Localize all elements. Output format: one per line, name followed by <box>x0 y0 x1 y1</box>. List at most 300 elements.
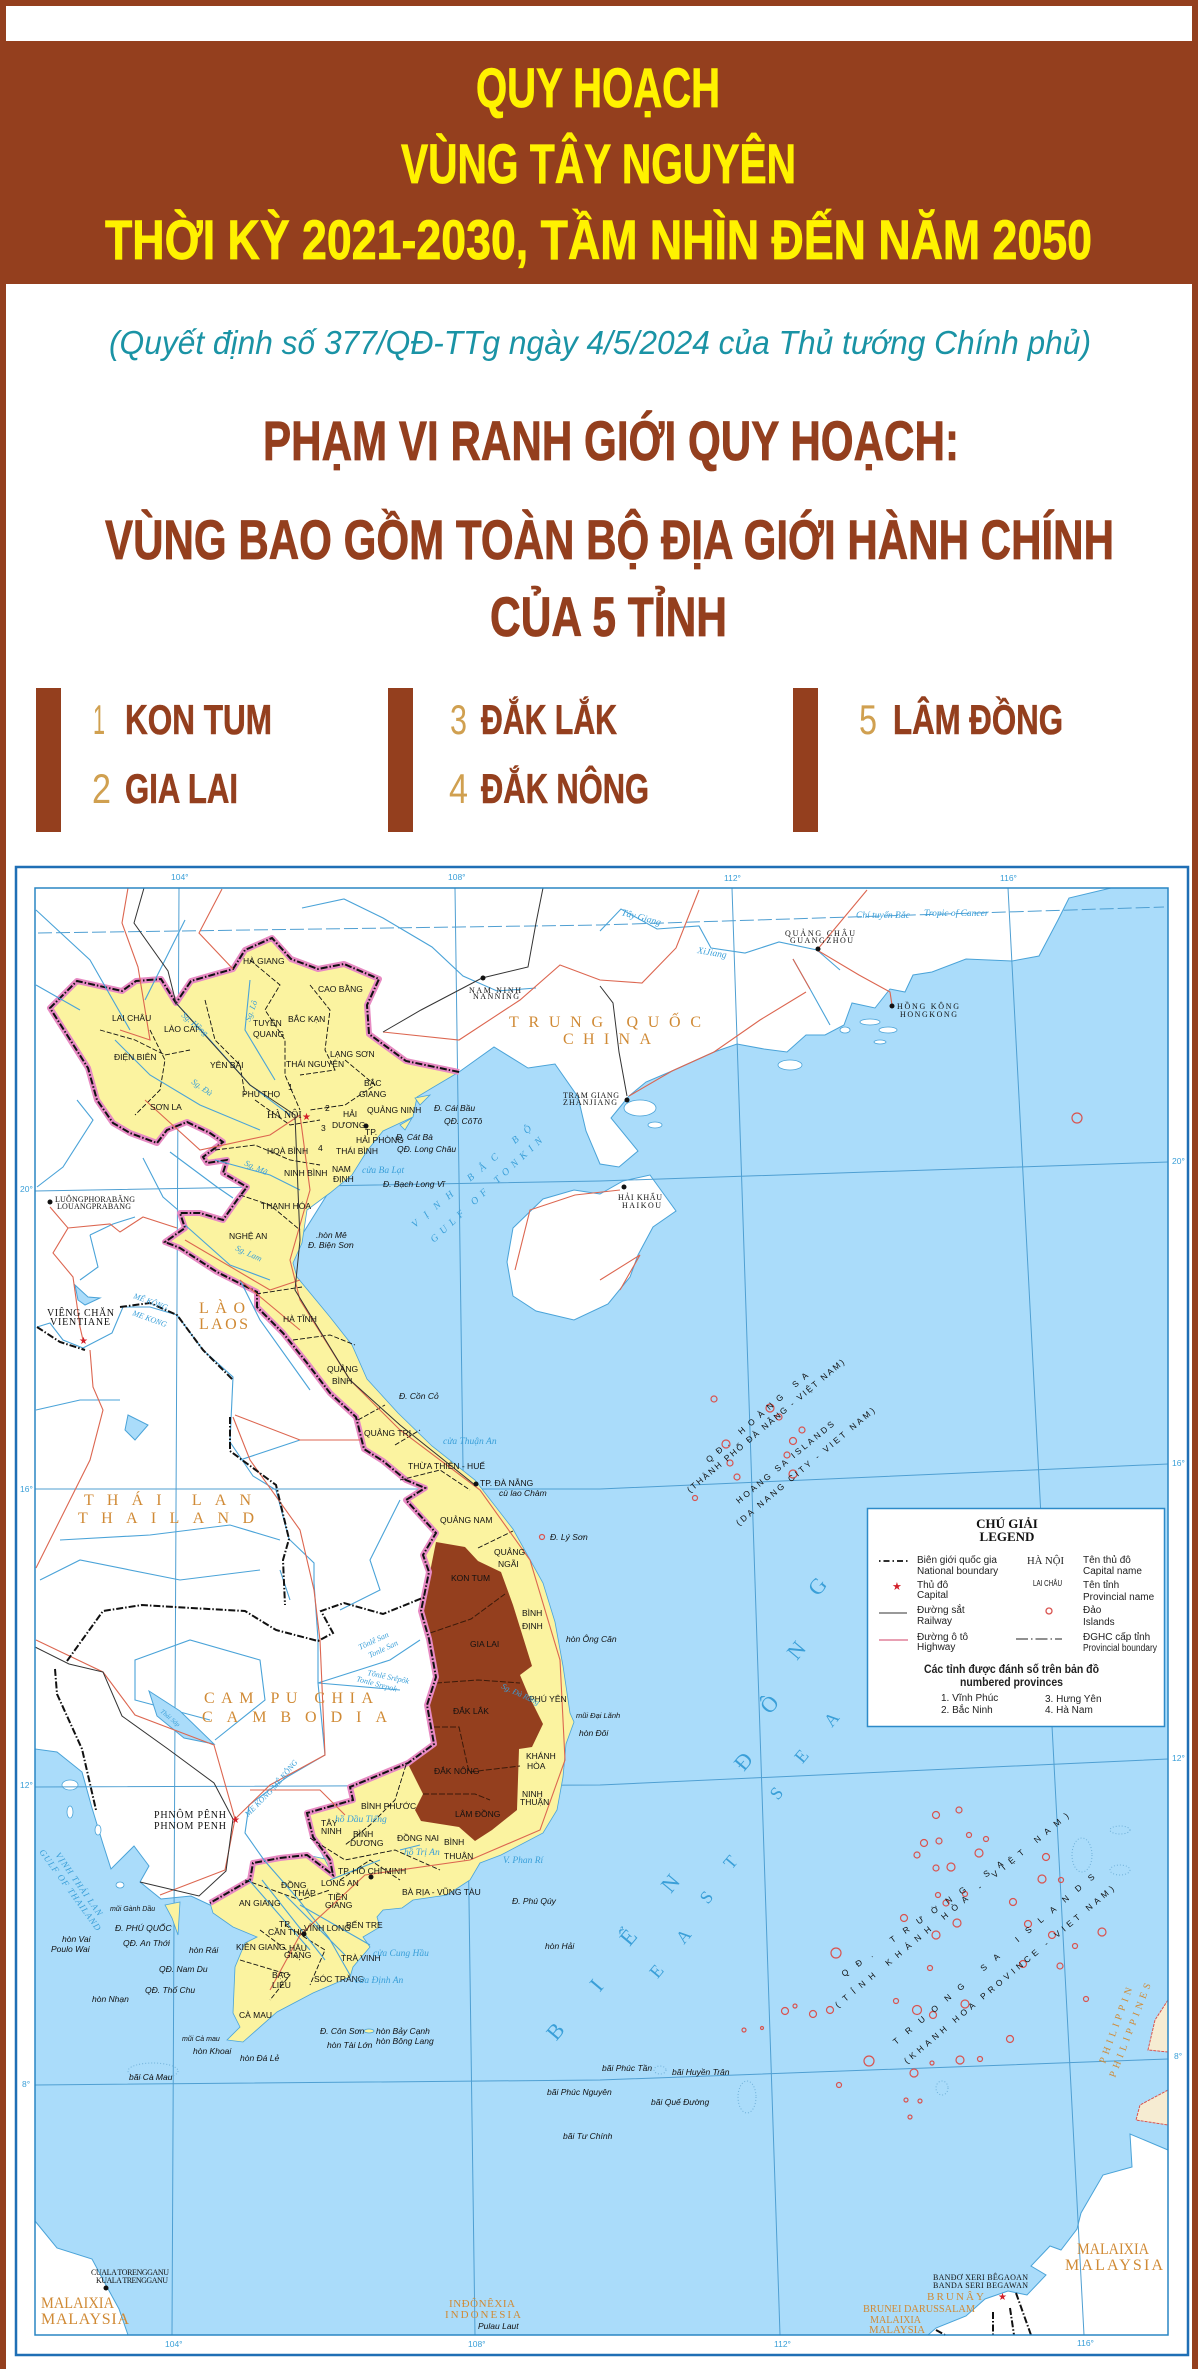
Vietnam land border <box>50 938 459 1903</box>
legend <box>868 1508 1164 1726</box>
island labels: Đ. Côn Sơn <box>320 2026 365 2036</box>
province labels: 3 <box>321 1123 326 1133</box>
East Sea label: S <box>766 1783 787 1803</box>
province labels: NINH BÌNH <box>284 1168 327 1178</box>
island labels: bãi Huyền Trân <box>672 2067 730 2077</box>
city labels: NANNING <box>473 992 519 1001</box>
province labels: QUẢNG NAM <box>440 1514 492 1525</box>
province labels: LÂM ĐỒNG <box>455 1808 500 1819</box>
degree labels: 16° <box>1172 1458 1185 1468</box>
island labels: hòn Bảy Cạnh <box>376 2026 430 2036</box>
city labels: VIENTIANE <box>50 1317 110 1328</box>
Vietnam territory <box>50 938 574 2042</box>
coastal islets <box>62 1019 897 1888</box>
city labels: TRẠM GIANG <box>563 1091 619 1100</box>
island labels: hòn Đôi <box>579 1728 609 1738</box>
city labels: NAM NINH <box>469 986 521 995</box>
water labels: ME KONG <box>242 1787 275 1819</box>
degree labels: 8° <box>1174 2051 1182 2061</box>
degree labels: 116° <box>1077 2338 1094 2348</box>
legend left column text: Biên giới quốc gia <box>917 1554 997 1566</box>
water labels: Tonle San <box>367 1638 399 1660</box>
country labels: THAILAND <box>78 1510 254 1527</box>
province labels: NINH <box>522 1789 543 1799</box>
city markers <box>48 946 894 2290</box>
numbered provinces: 3. Hưng Yên <box>1045 1694 1102 1705</box>
province list: column 1: 2 <box>92 765 111 812</box>
map inner border <box>35 888 1168 2335</box>
province labels: NGHỆ AN <box>229 1231 267 1241</box>
city labels: ZHANJIANG <box>563 1098 617 1107</box>
province labels <box>112 956 567 2020</box>
provincial boundaries <box>100 960 513 2000</box>
island labels: hòn Hải <box>545 1941 575 1951</box>
island labels: Đ. Cái Bầu <box>434 1103 475 1113</box>
province labels: BẾN TRE <box>346 1920 383 1930</box>
island labels: Đ. Cát Bà <box>396 1132 433 1142</box>
numbered provinces: numbered provinces <box>960 1677 1063 1689</box>
degree labels: 12° <box>1172 1753 1185 1763</box>
water labels: cửa Cung Hầu <box>373 1948 429 1959</box>
province labels: ĐỒNG <box>281 1879 306 1890</box>
degree labels: 8° <box>22 2079 30 2089</box>
province labels: HÀ GIANG <box>243 956 285 966</box>
title band: QUY HOẠCH <box>476 56 720 119</box>
Malaysia peninsula <box>35 2221 128 2335</box>
water labels: Tropic of Cancer <box>924 908 989 919</box>
legend right column text: ĐGHC cấp tỉnh <box>1083 1631 1150 1643</box>
water labels: cửa Định An <box>355 1976 404 1986</box>
legend right column text: Provincial name <box>1083 1592 1155 1603</box>
island labels: hòn Ông Căn <box>566 1634 617 1644</box>
East Sea label: N <box>782 1636 811 1664</box>
city labels: BANĐƠ XERI BÊGAOAN <box>933 2272 1028 2282</box>
Philippines fragment <box>1136 2000 1168 2125</box>
province labels: QUẢNG TRỊ <box>364 1427 411 1438</box>
water labels: VỊNH BẮC BỘ <box>409 1122 534 1230</box>
East Sea label: I <box>584 1974 608 1996</box>
island labels: hòn Vai <box>62 1934 92 1944</box>
island labels: QĐ. An Thới <box>123 1938 171 1948</box>
degree labels: 16° <box>20 1484 33 1494</box>
province labels: 4 <box>318 1143 323 1153</box>
scope heading: PHẠM VI RANH GIỚI QUY HOẠCH: <box>263 409 959 472</box>
province labels: QUANG <box>253 1029 284 1039</box>
East Sea label: B <box>541 2018 570 2045</box>
province list: column 1: KON TUM <box>125 696 272 743</box>
province labels: YÊN BÁI <box>210 1060 244 1070</box>
island labels: hòn Nhạn <box>92 1994 129 2004</box>
legend title: CHÚ GIẢI <box>976 1516 1038 1531</box>
archipelago labels: QĐ. TRƯỜNG SA <box>839 1858 1005 1979</box>
roads <box>36 888 892 1990</box>
province labels: TUYÊN <box>253 1018 282 1028</box>
Borneo <box>928 2134 1168 2335</box>
province labels: BÌNH <box>444 1837 464 1847</box>
province labels: BÌNH <box>522 1608 542 1618</box>
island labels: Đ. PHÚ QUỐC <box>115 1922 173 1933</box>
archipelago labels: (DA NANG CITY - VIET NAM) <box>734 1405 877 1528</box>
city labels: PHNÔM PÊNH <box>154 1809 226 1821</box>
province labels: DƯƠNG <box>350 1838 383 1848</box>
province labels: GIA LAI <box>470 1639 499 1649</box>
province labels: LONG AN <box>321 1878 359 1888</box>
Hainan island <box>507 1175 676 1320</box>
province labels: NINH <box>321 1826 342 1836</box>
city labels <box>47 928 1028 2290</box>
water labels: cửa Thuận An <box>443 1437 497 1447</box>
East Sea label: T <box>719 1852 742 1873</box>
numbered provinces: 2. Bắc Ninh <box>941 1703 993 1716</box>
island labels: QĐ. Long Châu <box>397 1144 456 1154</box>
province labels: TP. ĐÀ NẴNG <box>480 1477 533 1488</box>
legend symbols: ★ <box>892 1581 902 1593</box>
city labels: HAIKOU <box>622 1201 661 1210</box>
province labels: ĐẮK LẮK <box>453 1706 489 1716</box>
legend right column text: Tên thủ đô <box>1083 1554 1131 1566</box>
East Sea label: S <box>696 1887 717 1907</box>
water labels: Tây Giang <box>620 908 662 928</box>
islands off the coast <box>165 1095 430 2033</box>
country labels: MALAIXIA <box>41 2295 114 2312</box>
capital stars: ★ <box>79 1336 88 1347</box>
province labels: BẮC <box>364 1078 381 1088</box>
country labels: TRUNG QUỐC <box>509 1012 701 1031</box>
city labels: CUALA TORENGGANU <box>91 2268 169 2277</box>
country labels: MALAIXIA <box>1077 2241 1149 2258</box>
province labels: QUẢNG NINH <box>367 1104 421 1115</box>
province labels: CÀ MAU <box>239 2010 272 2020</box>
title band <box>0 41 1198 284</box>
island labels: bãi Phúc Nguyên <box>547 2087 612 2097</box>
East Sea label: Ể <box>614 1924 642 1950</box>
water labels: Sg. Đà Rằng <box>500 1682 541 1707</box>
archipelago labels: (TỈNH KHÁNH HÒA - VIỆT NAM) <box>832 1810 1071 2010</box>
legend right column text <box>1083 1554 1157 1654</box>
legend left column text: Đường sắt <box>917 1603 965 1616</box>
province labels: HÒA <box>527 1761 546 1771</box>
country labels: LÀO <box>199 1298 245 1317</box>
province labels: BÌNH <box>332 1376 352 1386</box>
province list: column 1: 1 <box>93 696 105 743</box>
province labels: THỪA THIÊN - HUẾ <box>408 1461 485 1471</box>
province labels: BÀ RỊA - VŨNG TÀU <box>402 1887 481 1897</box>
province labels: THÁP <box>293 1888 316 1898</box>
province labels: GIANG <box>325 1900 352 1910</box>
degree labels: 20° <box>1172 1156 1185 1166</box>
East Sea label: N <box>656 1869 685 1897</box>
province labels: THÁI BÌNH <box>336 1146 378 1156</box>
province list: column 3 <box>793 688 1063 832</box>
province labels: CAO BẰNG <box>318 984 363 994</box>
country labels: PHILIPPINES <box>1108 1982 1154 2079</box>
province labels: VĨNH LONG <box>304 1923 351 1933</box>
degree labels: 20° <box>20 1184 33 1194</box>
neighbouring national boundaries <box>37 1303 1031 2335</box>
legend title: LEGEND <box>980 1529 1034 1544</box>
province labels: SÓC TRĂNG <box>314 1974 364 1984</box>
country labels: MALAYSIA <box>41 2311 129 2328</box>
legend symbols: LAI CHÂU <box>1033 1578 1062 1588</box>
archipelago labels: QĐ. HOÀNG SA <box>704 1370 810 1465</box>
country labels: THÁI LAN <box>84 1490 251 1509</box>
province list: column 3: 5 <box>859 696 877 743</box>
water labels: MÊ KÔNG <box>131 1290 170 1312</box>
legend right column text: Đảo <box>1083 1605 1102 1616</box>
scope heading <box>105 409 1114 648</box>
country labels: INĐÔNÊXIA <box>449 2298 515 2310</box>
legend right column text: Capital name <box>1083 1566 1142 1577</box>
legend left column text: Capital <box>917 1590 948 1601</box>
province labels: THANH HÓA <box>261 1201 311 1211</box>
archipelago labels: TRUONG SA ISLANDS <box>891 1872 1097 2047</box>
province list: column 2: ĐẮK LẮK <box>481 695 617 743</box>
Hoang Sa and Truong Sa islands <box>540 1113 1106 2119</box>
province list: column 3: LÂM ĐỒNG <box>893 695 1063 743</box>
country labels: INDONESIA <box>445 2309 521 2321</box>
province labels: HẢI PHÒNG <box>356 1134 404 1145</box>
city labels: HONGKONG <box>900 1010 957 1019</box>
island labels: Đ. Phú Qúy <box>512 1896 557 1906</box>
province labels: KHÁNH <box>526 1751 556 1761</box>
graticule <box>35 888 1168 2335</box>
province labels: GIANG <box>359 1089 386 1099</box>
water labels: hồ Dầu Tiếng <box>335 1814 387 1825</box>
country labels: MALAIXIA <box>870 2314 921 2326</box>
island labels: hòn Bông Lang <box>376 2036 434 2046</box>
East Sea label: A <box>672 1925 695 1948</box>
archipelago labels: (KHANH HOA PROVINCE - VIET NAM) <box>902 1884 1116 2066</box>
island labels: bãi Quế Đường <box>651 2097 710 2107</box>
water labels: GULF OF THAILAND <box>37 1847 103 1933</box>
province labels: TÂY <box>321 1818 338 1828</box>
railways <box>35 888 627 1896</box>
country labels: MALAYSIA <box>869 2324 925 2336</box>
water labels: V. Phan Rí <box>503 1856 545 1866</box>
island labels: Đ. Cồn Cỏ <box>399 1391 439 1401</box>
country labels: CAMBODIA <box>202 1709 387 1726</box>
numbered provinces: 1. Vĩnh Phúc <box>941 1693 998 1704</box>
province list: column 2: 3 <box>450 696 467 743</box>
degree labels <box>20 872 1185 2349</box>
capital stars: ★ <box>231 1815 240 1826</box>
province list: column 2: ĐẮK NÔNG <box>481 764 649 812</box>
city labels: LUÔNGPHORABĂNG <box>55 1194 135 1204</box>
city labels: HẢI KHẨU <box>618 1192 662 1202</box>
capital stars: ★ <box>998 2292 1007 2303</box>
island labels: Poulo Wai <box>51 1944 91 1954</box>
province list: column 1 <box>36 688 272 832</box>
province labels: ĐỊNH <box>522 1621 543 1631</box>
water labels: Sg. Đà <box>190 1076 215 1098</box>
degree labels: 12° <box>20 1780 33 1790</box>
city labels: LOUANGPRABANG <box>57 1202 131 1211</box>
water labels: Sg. Mã <box>243 1158 270 1177</box>
province labels: NAM <box>332 1164 351 1174</box>
numbered provinces: Các tỉnh được đánh số trên bản đồ <box>924 1664 1099 1676</box>
island labels: QĐ. CôTô <box>444 1116 483 1126</box>
country labels: BRUNÂY <box>927 2291 984 2303</box>
island labels: bãi Cà Mau <box>129 2072 173 2082</box>
island labels: Đ. Biện Sơn <box>308 1240 354 1250</box>
province labels: PHÚ THỌ <box>242 1089 280 1099</box>
province list: column 1: GIA LAI <box>125 765 238 812</box>
degree labels: 112° <box>724 873 741 883</box>
title band: VÙNG TÂY NGUYÊN <box>401 132 796 195</box>
decision subtitle: (Quyết định số 377/QĐ-TTg ngày 4/5/2024 của Thủ tướng Chính phủ) <box>109 324 1091 361</box>
legend symbols: HÀ NỘI <box>1027 1555 1064 1567</box>
water labels: hồ Trị An <box>404 1847 440 1858</box>
city labels: VIÊNG CHĂN <box>47 1307 114 1319</box>
country labels: BRUNEI DARUSSALAM <box>863 2303 975 2315</box>
province labels: LAI CHÂU <box>112 1013 151 1023</box>
province labels: NGÃI <box>498 1559 519 1569</box>
island labels: .hòn Mê <box>316 1230 347 1240</box>
East Sea label: E <box>645 1961 668 1982</box>
province labels: DƯƠNG <box>332 1120 365 1130</box>
archipelago labels: (THÀNH PHỐ ĐÀ NẴNG - VIỆT NAM) <box>684 1356 846 1495</box>
map <box>20 872 1185 2349</box>
province labels: THUẬN <box>444 1851 473 1861</box>
province list: column 2 <box>388 688 649 832</box>
capital stars <box>79 1112 1007 2303</box>
Highlands provincial boundaries <box>423 1594 520 1800</box>
province labels: BÌNH PHƯỚC <box>361 1801 416 1811</box>
East Sea label: E <box>790 1746 813 1767</box>
island labels: cù lao Chàm <box>499 1488 547 1498</box>
province labels: ĐỒNG NAI <box>397 1832 439 1843</box>
water labels: MÊ KÔNG <box>268 1757 300 1792</box>
legend left column text <box>917 1554 998 1653</box>
island labels: hòn Khoai <box>193 2046 232 2056</box>
water labels: Sg. Lam <box>234 1243 264 1264</box>
province list: column 2: 4 <box>449 765 468 812</box>
province labels: BẮC KẠN <box>288 1014 325 1024</box>
province labels: QUẢNG <box>494 1546 525 1557</box>
water labels: Tônlê San <box>357 1630 390 1652</box>
city labels: PHNOM PENH <box>154 1821 226 1832</box>
legend right column text: Tên tỉnh <box>1083 1579 1119 1591</box>
Tonle Sap lake <box>149 1691 214 1744</box>
city labels: BANDA SERI BEGAWAN <box>933 2281 1028 2290</box>
province labels: KON TUM <box>451 1573 490 1583</box>
legend symbols <box>879 1555 1064 1640</box>
province labels: THÁI NGUYÊN <box>286 1059 344 1069</box>
Laos lakes <box>75 1285 148 1440</box>
legend left column text: National boundary <box>917 1566 998 1577</box>
scope heading: CỦA 5 TỈNH <box>490 585 727 648</box>
country labels: PHILIPPIN <box>1097 1986 1135 2065</box>
province labels: HẬU <box>289 1943 307 1953</box>
capital stars: ★ <box>302 1112 311 1123</box>
island labels: hòn Rái <box>189 1945 219 1955</box>
water labels <box>37 908 989 1986</box>
province labels: BẠC <box>272 1970 289 1980</box>
province labels: TP. <box>365 1127 377 1137</box>
water labels: XiJiang <box>695 946 728 961</box>
legend title <box>976 1516 1038 1544</box>
mainland: China, Laos, Thailand, Cambodia <box>35 888 1111 1905</box>
province labels: TRÀ VINH <box>341 1953 381 1963</box>
water labels: ME KONG <box>130 1308 168 1329</box>
island labels: hòn Tài Lớn <box>327 2040 373 2050</box>
sea <box>35 888 1168 2335</box>
country labels: CAM PU CHIA <box>204 1690 373 1707</box>
island labels <box>51 1103 730 2331</box>
water labels: cửa Ba Lạt <box>362 1166 404 1176</box>
island labels: mũi Đại Lãnh <box>576 1711 620 1720</box>
water labels: Tônlê Srêpôk <box>367 1668 410 1686</box>
water labels: VỊNH THÁI LAN <box>53 1850 105 1918</box>
legend left column text: Highway <box>917 1642 955 1653</box>
city labels: HỒNG KÔNG <box>897 1001 959 1011</box>
island labels: bãi Tư Chính <box>563 2131 613 2141</box>
province labels: THUẬN <box>520 1797 549 1807</box>
Central Highlands region <box>409 1542 543 1841</box>
legend right column text: Islands <box>1083 1617 1115 1628</box>
province labels: GIANG <box>284 1950 311 1960</box>
legend left column text: Đường ô tô <box>917 1632 968 1643</box>
East Sea label <box>541 1572 843 2045</box>
East Sea label: Đ <box>729 1747 758 1775</box>
country labels: LAOS <box>199 1316 248 1333</box>
degree labels: 116° <box>1000 873 1017 883</box>
province labels: ĐẮK NÔNG <box>434 1766 479 1776</box>
province labels: TIỀN <box>328 1892 347 1902</box>
province labels: HẢI <box>343 1108 357 1119</box>
island labels: Đ. Lý Sơn <box>550 1532 588 1542</box>
island labels: QĐ. Nam Du <box>159 1964 208 1974</box>
country labels: MALAYSIA <box>1065 2257 1163 2274</box>
archipelago labels: HOANG SA ISLANDS <box>734 1419 836 1506</box>
province labels: LÀO CAI <box>164 1024 198 1034</box>
degree labels: 108° <box>448 872 466 882</box>
island labels: Pulau Laut <box>478 2321 519 2331</box>
island labels: bãi Phúc Tần <box>602 2063 652 2073</box>
island labels: hòn Đá Lẻ <box>240 2053 279 2063</box>
dotted reefs <box>128 1826 1130 2113</box>
degree labels: 108° <box>468 2339 486 2349</box>
degree labels: 112° <box>774 2339 791 2349</box>
water labels: Sg. Hồng <box>180 1010 210 1038</box>
province labels: ĐỊNH <box>333 1174 354 1184</box>
province labels: HOÀ BÌNH <box>267 1146 308 1156</box>
water labels: Chí tuyến Bắc <box>856 910 911 921</box>
island labels: Đ. Bạch Long Vĩ <box>383 1179 447 1189</box>
province labels: LIÊU <box>272 1980 291 1990</box>
East Sea label: Ô <box>755 1690 784 1718</box>
province labels: LẠNG SƠN <box>330 1049 375 1059</box>
city labels: KUALA TRENGGANU <box>96 2276 168 2285</box>
archipelago labels <box>684 1356 1116 2066</box>
province labels: 2 <box>325 1103 330 1113</box>
degree labels: 104° <box>171 872 189 882</box>
province labels: SƠN LA <box>150 1102 182 1112</box>
city labels: HÀ NỘI <box>267 1109 302 1121</box>
legend left column text: Thủ đô <box>917 1579 949 1591</box>
city labels: GUANGZHOU <box>790 936 853 945</box>
map frame <box>16 867 1188 2355</box>
province labels: HÀ TĨNH <box>283 1314 317 1324</box>
legend left column text: Railway <box>917 1616 952 1627</box>
country labels: CHINA <box>563 1031 651 1048</box>
East Sea label: A <box>820 1708 843 1731</box>
province labels: CẦN THƠ <box>268 1927 307 1937</box>
province labels: 1 <box>288 1082 293 1092</box>
water labels: Tonle Srepok <box>355 1674 398 1694</box>
numbered provinces: 4. Hà Nam <box>1045 1705 1093 1716</box>
island labels: mũi Gành Dầu <box>110 1904 155 1913</box>
